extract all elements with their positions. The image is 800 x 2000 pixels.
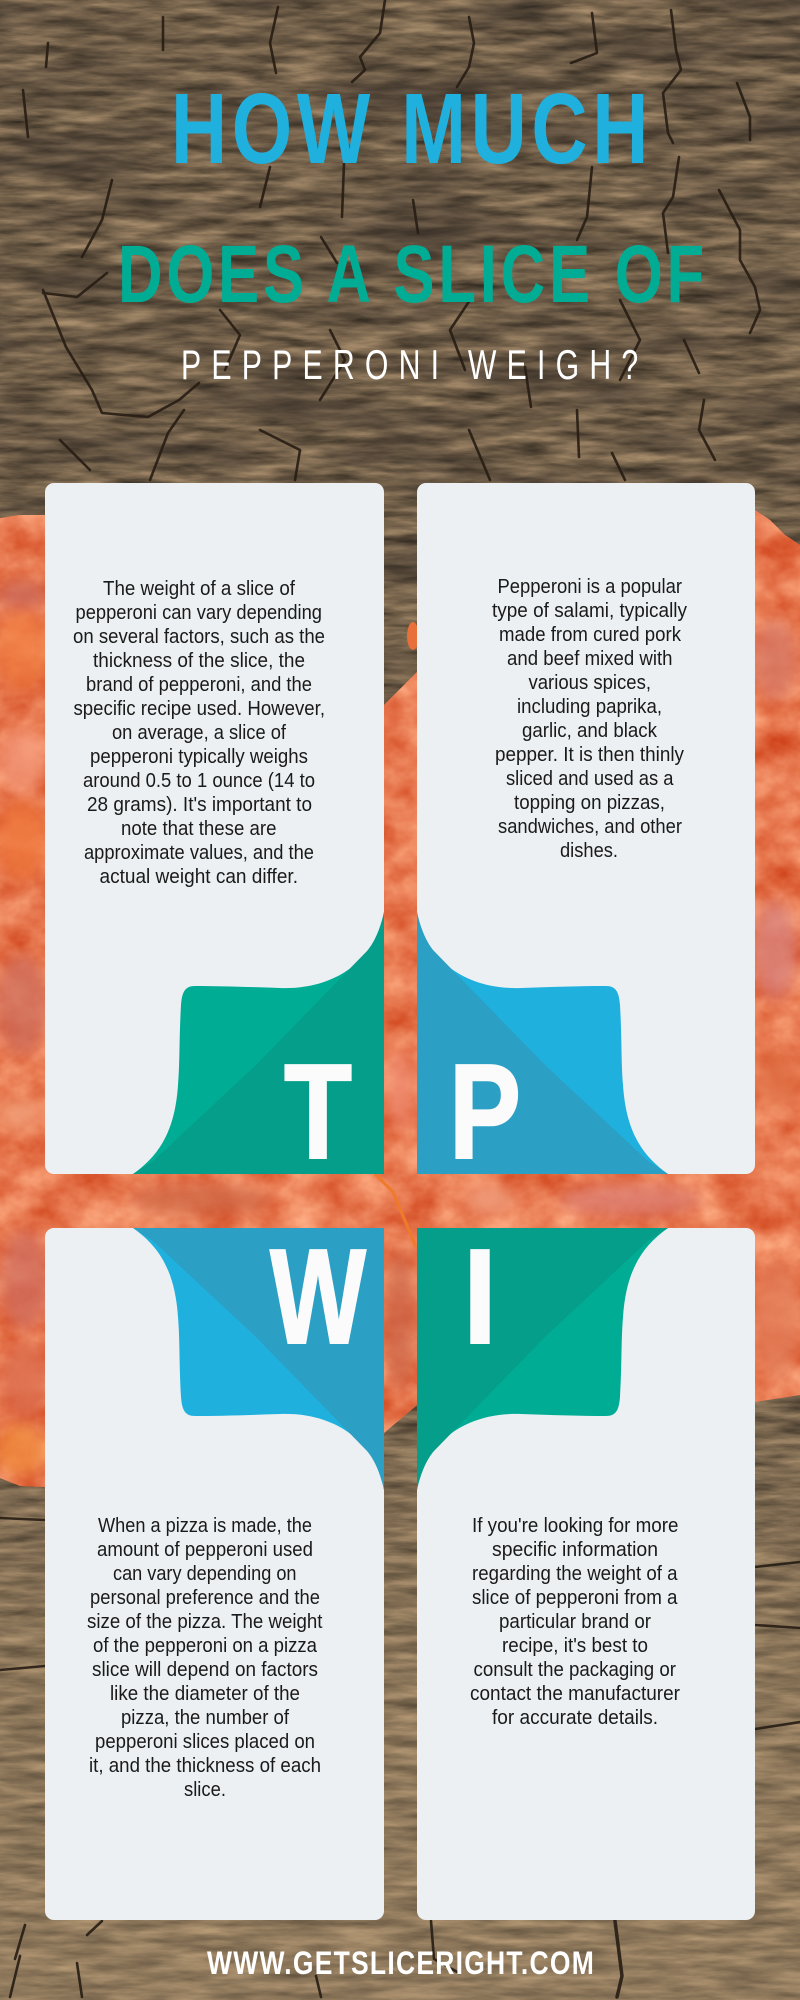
text block: pepperoni on a pizza: size of the pizza. The weight (87, 1611, 323, 1633)
text block: more specific information: consult the packaging or (474, 1659, 676, 1681)
icon: blue P badge: P (449, 1036, 521, 1187)
text block: pepperoni on a pizza: When a pizza is made, the (98, 1515, 312, 1537)
title line: how much: HOW MUCH (171, 73, 653, 185)
icon: green I badge: I (463, 1221, 497, 1372)
text block: pepperoni on a pizza: personal preference and the (90, 1587, 320, 1609)
text block: more specific information (470, 1515, 680, 1729)
text block: what pepperoni is: sandwiches, and other (498, 816, 682, 838)
icon: blue P badge (417, 912, 668, 1187)
panel: weight of a slice (45, 483, 384, 1174)
footer url: WWW.GETSLICERIGHT.COM (207, 1945, 595, 1981)
text block: more specific information: recipe, it's best to (502, 1635, 648, 1657)
icon: blue W badge: W (270, 1221, 366, 1372)
text block: weight of a slice: pepperoni typically weighs (90, 746, 308, 768)
text block: more specific information: specific information (492, 1539, 658, 1561)
text block: what pepperoni is: Pepperoni is a popular (498, 576, 682, 598)
text block: weight of a slice: around 0.5 to 1 ounce (14 to (83, 770, 315, 792)
panel: what pepperoni is (417, 483, 755, 1174)
text block: weight of a slice: note that these are (121, 818, 276, 840)
text block: more specific information: regarding the weight of a (472, 1563, 678, 1585)
text block: more specific information: If you're looking for more (472, 1515, 678, 1537)
text block: pepperoni on a pizza: like the diameter of the (110, 1683, 300, 1705)
text block: pepperoni on a pizza: slice will depend on factors (92, 1659, 318, 1681)
text block: what pepperoni is: dishes. (560, 840, 618, 862)
icon: green I badge (417, 1221, 668, 1490)
text block: what pepperoni is: made from cured pork (499, 624, 682, 646)
text block: weight of a slice: 28 grams). It's important to (87, 794, 312, 816)
title (118, 73, 708, 388)
panel: pepperoni on a pizza (45, 1228, 384, 1920)
text block: weight of a slice: thickness of the slice, the (93, 650, 305, 672)
text block: more specific information: contact the manufacturer (470, 1683, 680, 1705)
text block: weight of a slice: approximate values, and the (84, 842, 314, 864)
text block: what pepperoni is: sliced and used as a (506, 768, 674, 790)
text block: pepperoni on a pizza (87, 1515, 323, 1801)
text block: what pepperoni is: various spices, (528, 672, 651, 694)
text block: pepperoni on a pizza: of the pepperoni on a pizza (93, 1635, 318, 1657)
icon: green T badge: T (284, 1036, 352, 1187)
text block: weight of a slice: actual weight can differ. (100, 866, 298, 888)
text block: weight of a slice: pepperoni can vary depending (76, 602, 322, 624)
text block: pepperoni on a pizza: pizza, the number of (121, 1707, 289, 1729)
text block: what pepperoni is: topping on pizzas, (514, 792, 665, 814)
pepperoni photo (0, 510, 800, 1487)
text block: pepperoni on a pizza: pepperoni slices placed on (95, 1731, 315, 1753)
text block: what pepperoni is: type of salami, typically (492, 600, 687, 622)
text block: weight of a slice: brand of pepperoni, and the (86, 674, 312, 696)
text block: weight of a slice: on average, a slice of (112, 722, 286, 744)
text block: more specific information: slice of pepperoni from a (472, 1587, 678, 1609)
text block: what pepperoni is (492, 576, 687, 862)
text block: what pepperoni is: and beef mixed with (507, 648, 672, 670)
text block: weight of a slice: specific recipe used. However, (74, 698, 325, 720)
title line: pepperoni weigh: PEPPERONI WEIGH? (181, 341, 638, 388)
icon: blue W badge (133, 1221, 384, 1490)
text block: more specific information: particular brand or (499, 1611, 651, 1633)
text block: what pepperoni is: pepper. It is then thinly (495, 744, 684, 766)
text block: what pepperoni is: including paprika, (517, 696, 662, 718)
text block: more specific information: for accurate details. (492, 1707, 658, 1729)
text block: weight of a slice: on several factors, such as the (73, 626, 325, 648)
text block: pepperoni on a pizza: it, and the thickness of each (89, 1755, 321, 1777)
text block: weight of a slice (73, 578, 325, 888)
icon: green T badge (133, 912, 384, 1187)
text block: what pepperoni is: garlic, and black (522, 720, 658, 742)
text block: weight of a slice: The weight of a slice of (103, 578, 295, 600)
panel: more specific information (417, 1228, 755, 1920)
text block: pepperoni on a pizza: amount of pepperoni used (97, 1539, 313, 1561)
text block: pepperoni on a pizza: can vary depending on (113, 1563, 296, 1585)
text block: pepperoni on a pizza: slice. (184, 1779, 226, 1801)
